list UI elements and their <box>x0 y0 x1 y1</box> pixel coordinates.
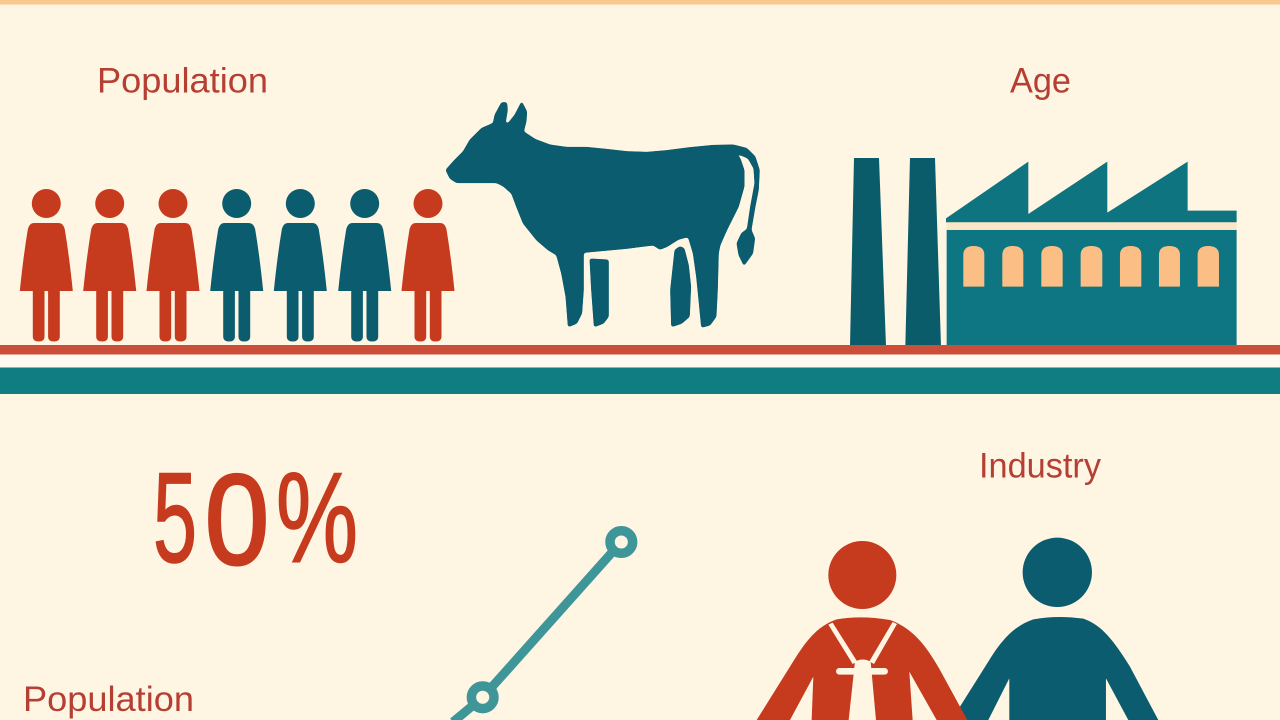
right strap <box>869 622 897 664</box>
red head <box>828 541 896 609</box>
red torso and arms <box>757 617 967 720</box>
left strap <box>828 623 857 664</box>
divider band teal <box>0 368 1280 394</box>
ground line red <box>0 345 1280 354</box>
tie <box>849 659 876 720</box>
window 5 <box>1120 246 1141 287</box>
upper data point <box>610 531 633 553</box>
person 1 red <box>20 189 73 342</box>
person 2 red <box>83 189 136 342</box>
teal head <box>1023 538 1092 607</box>
heading: Age: Age <box>1010 62 1071 100</box>
window 3 <box>1041 246 1063 287</box>
two large figures <box>757 538 1158 720</box>
icon: factory <box>850 158 1237 346</box>
chimney 1 <box>850 158 886 346</box>
window 7 <box>1198 246 1219 287</box>
row of people icons <box>20 189 455 342</box>
cow inner front leg <box>590 259 608 327</box>
person 7 red <box>402 189 454 342</box>
factory building <box>947 230 1237 346</box>
person 6 teal <box>338 189 391 342</box>
factory windows <box>963 246 1219 287</box>
digit 5: 5 <box>153 447 197 590</box>
white backpack straps and tie <box>828 622 897 720</box>
cow inner back leg <box>671 247 691 327</box>
saw-tooth roof <box>946 162 1237 222</box>
digit 0: 0 <box>205 449 269 592</box>
window 1 <box>963 246 984 287</box>
icon: cow <box>446 102 759 327</box>
red figure <box>757 541 967 720</box>
window 2 <box>1002 246 1023 287</box>
lower data point <box>471 686 494 709</box>
big number: 50% <box>153 447 358 592</box>
teal torso and arms <box>960 617 1158 720</box>
trend line <box>453 542 621 720</box>
top accent bar <box>0 0 1280 4</box>
line chart <box>453 531 633 720</box>
roof gap band <box>947 222 1237 230</box>
chimney 2 <box>905 158 941 346</box>
cow body <box>446 102 759 327</box>
window 4 <box>1081 246 1102 287</box>
person 3 red <box>146 189 200 342</box>
heading: Population: Population <box>97 62 268 100</box>
person 4 teal <box>210 189 263 342</box>
percent sign: % <box>276 447 358 590</box>
label: Population lower: Population <box>23 680 194 719</box>
label: Industry: Industry <box>979 446 1101 486</box>
window 6 <box>1159 246 1180 287</box>
teal figure <box>960 538 1158 720</box>
person 5 teal <box>274 189 327 342</box>
white stripe <box>0 354 1280 368</box>
cross bar <box>836 668 888 675</box>
